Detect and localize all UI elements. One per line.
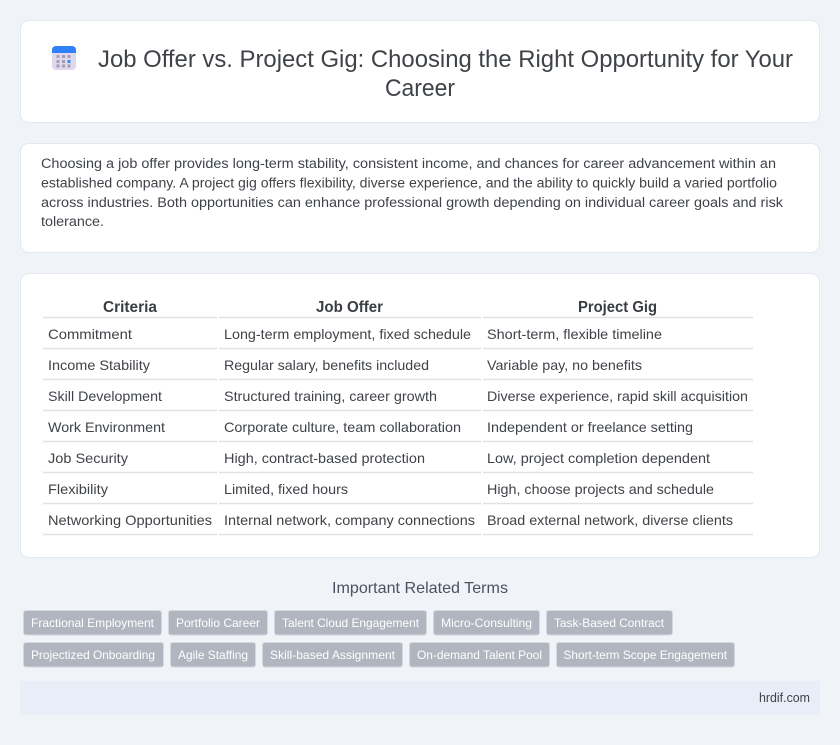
tag: Talent Cloud Engagement (274, 610, 426, 635)
tag: Micro-Consulting (434, 610, 540, 635)
table header (103, 299, 657, 316)
table row: flexibility: Limited, fixed hours (224, 481, 348, 497)
tag: Agile Staffing (170, 642, 256, 667)
table row: flexibility (48, 481, 714, 497)
tag: Projectized Onboarding (24, 642, 164, 667)
table row: job security: High, contract-based protection (224, 450, 425, 466)
table row: commitment: Short-term, flexible timeline (487, 326, 662, 342)
panel: comparison table (20, 274, 820, 558)
table row: networking opportunities (48, 512, 733, 528)
tag: On-demand Talent Pool (410, 642, 550, 667)
tag: Task-Based Contract (546, 610, 672, 635)
tag: On-demand Talent Pool: On-demand Talent Pool (417, 648, 542, 662)
title: Career (385, 75, 455, 102)
table row: networking opportunities: Broad external network, diverse clients (487, 512, 733, 528)
tag: Talent Cloud Engagement: Talent Cloud Engagement (282, 616, 420, 630)
tag: Task-Based Contract: Task-Based Contract (554, 616, 665, 630)
title (98, 46, 793, 102)
table row: job security (48, 450, 710, 466)
table row: flexibility: Flexibility (48, 481, 108, 497)
footer source text: hrdif.com (759, 690, 810, 705)
tag: Agile Staffing: Agile Staffing (178, 648, 248, 662)
footer (20, 681, 820, 714)
table header: Project Gig (578, 299, 657, 316)
table row: skill development: Skill Development (48, 388, 162, 404)
table row: work environment (48, 419, 693, 435)
table row: income stability: Income Stability (48, 357, 150, 373)
table row: commitment (48, 326, 662, 342)
table header: Job Offer (316, 299, 383, 316)
text block: introduction: tolerance. (41, 214, 104, 230)
table row: job security: Job Security (48, 450, 128, 466)
table row: commitment: Commitment (48, 326, 132, 342)
table row: income stability: Variable pay, no benefits (487, 357, 642, 373)
title: Job Offer vs. Project Gig: Choosing the Right Opportunity for Your (98, 46, 793, 73)
text block: introduction (41, 156, 784, 230)
text block: introduction: established company. A project gig offers flexibility, diverse experience, and the ability to quickly build a varied portfolio (41, 176, 777, 192)
tag: Fractional Employment (24, 610, 162, 635)
icon: calendar (52, 46, 76, 70)
tag: Portfolio Career: Portfolio Career (176, 616, 260, 630)
tag: Projectized Onboarding: Projectized Onboarding (31, 648, 155, 662)
table row: work environment: Independent or freelance setting (487, 419, 693, 435)
heading: important related terms: Important Related Terms (332, 580, 508, 597)
table row: skill development (48, 388, 748, 404)
tag: Skill-based Assignment (262, 642, 402, 667)
panel: title header (20, 20, 820, 122)
panel: introduction text (20, 144, 820, 252)
text block: introduction: Choosing a job offer provides long-term stability, consistent income, and chances for career advancement within an (41, 156, 776, 172)
table row: job security: Low, project completion dependent (487, 450, 710, 466)
table row: skill development: Structured training, career growth (224, 388, 437, 404)
panel: related term tags (24, 610, 734, 667)
tag: Short-term Scope Engagement (556, 642, 734, 667)
table row: networking opportunities: Networking Opportunities (48, 512, 212, 528)
table row: income stability (48, 357, 642, 373)
tag: Fractional Employment: Fractional Employment (31, 616, 155, 630)
text block: introduction: across industries. Both opportunities can enhance professional growth depending on individual career goals and risk (41, 195, 784, 211)
table row: work environment: Corporate culture, team collaboration (224, 419, 461, 435)
table row: commitment: Long-term employment, fixed schedule (224, 326, 471, 342)
table row: work environment: Work Environment (48, 419, 165, 435)
tag: Skill-based Assignment: Skill-based Assignment (270, 648, 396, 662)
tag: Micro-Consulting: Micro-Consulting (441, 616, 532, 630)
table row: skill development: Diverse experience, rapid skill acquisition (487, 388, 748, 404)
tag: Portfolio Career (168, 610, 268, 635)
table row: income stability: Regular salary, benefits included (224, 357, 429, 373)
table row: networking opportunities: Internal network, company connections (224, 512, 475, 528)
table row: flexibility: High, choose projects and schedule (487, 481, 714, 497)
tag: Short-term Scope Engagement: Short-term Scope Engagement (564, 648, 728, 662)
table header: Criteria (103, 299, 157, 316)
